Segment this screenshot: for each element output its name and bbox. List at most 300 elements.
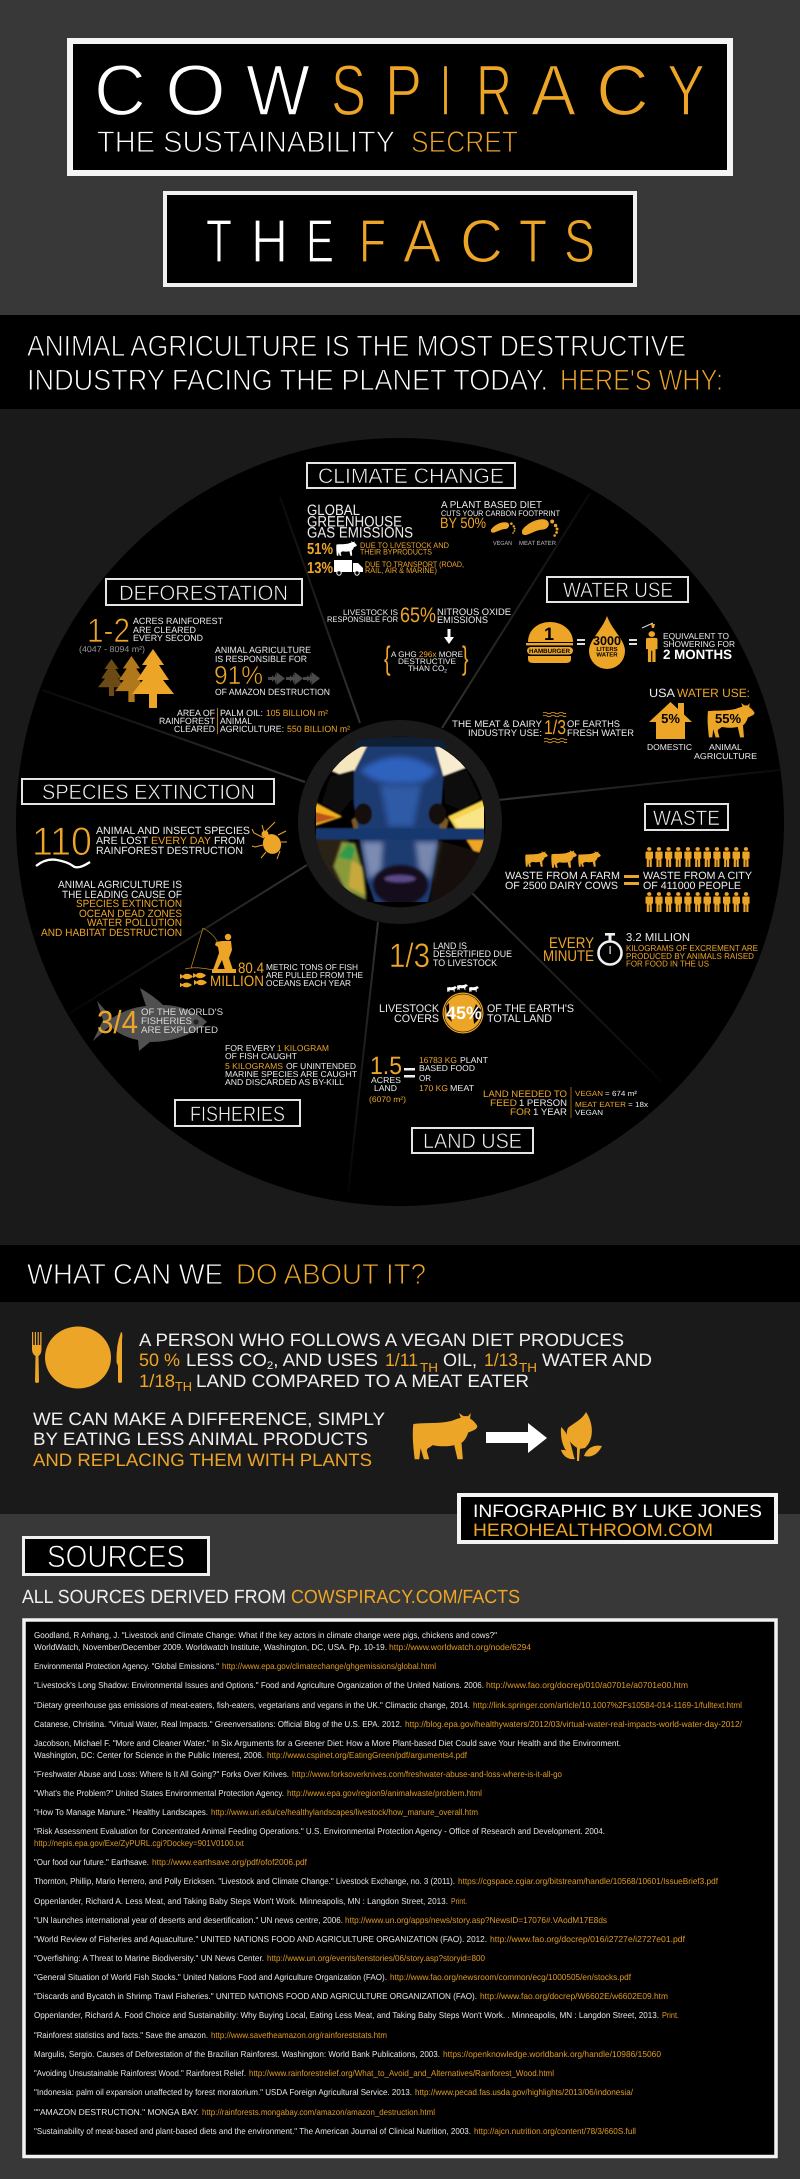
stat: 1-2 acres xyxy=(79,612,223,654)
panel: sources list: "Sustainability of meat-based and plant-based diets and the environment." The American Journal of Clinical Nutrition, 2003. xyxy=(34,2126,471,2136)
stat: three quarters fisheries: FISHERIES xyxy=(141,1016,192,1027)
text: vegan diet facts: , AND USES xyxy=(273,1350,378,1370)
intro band xyxy=(0,315,800,409)
panel: sources list: Environmental Protection Agency. "Global Emissions." xyxy=(34,1661,219,1671)
title: COW xyxy=(94,51,310,131)
panel: fisheries xyxy=(93,928,363,1126)
text: all sources derived: COWSPIRACY.COM/FACTS xyxy=(291,1587,520,1608)
stat: 1.5 acres xyxy=(369,1052,488,1104)
stat: land needed per person: FOR xyxy=(510,1107,531,1118)
text: waste from farm equals city xyxy=(505,870,752,892)
stat: 91 percent: IS RESPONSIBLE FOR xyxy=(215,654,307,664)
panel: sources list: Print. xyxy=(451,1896,467,1906)
stat: nitrous oxide: NITROUS OXIDE xyxy=(437,607,511,618)
icon: water drop 3000 litres: 3000 xyxy=(593,634,621,648)
panel: sources list: Goodland, R Anhang, J. "Livestock and Climate Change: What if the key actors in climate change were pigs, chickens and cows?" xyxy=(34,1630,497,1640)
stat: 13 percent transport: RAIL, AIR & MARINE) xyxy=(365,566,437,575)
equals xyxy=(629,639,637,645)
stat: 1.5 acres: LAND xyxy=(374,1083,397,1093)
stat: 80.4 million: OCEANS EACH YEAR xyxy=(266,978,351,988)
text: showering 2 months: SHOWERING FOR xyxy=(663,639,735,649)
stat: 3.2 million kilograms: KILOGRAMS OF EXCREMENT ARE xyxy=(626,943,758,953)
stat: one third fresh water: 1/3 xyxy=(544,717,566,739)
stat: 80.4 million: ARE PULLED FROM THE xyxy=(266,970,363,980)
title word: FACTS xyxy=(359,207,595,275)
callout: ghg 296x: 2 xyxy=(444,668,447,674)
panel: sources list: Jacobson, Michael F. "More and Cleaner Water." In Six Arguments for a Greener Diet: How a More Plant-based Diet Could save Your Health and the Environment. xyxy=(34,1738,621,1748)
heading: climate change: CLIMATE CHANGE xyxy=(318,465,504,488)
title: SPIRACY xyxy=(331,51,705,131)
text: all sources derived: ALL SOURCES DERIVED FROM xyxy=(22,1587,286,1608)
intro band: ANIMAL AGRICULTURE IS THE MOST DESTRUCTIVE xyxy=(27,330,686,363)
heading: deforestation: DEFORESTATION xyxy=(119,582,288,605)
panel: sources list: "What's the Problem?" United States Environmental Protection Agency. xyxy=(34,1788,284,1798)
icon: cow 55 percent xyxy=(708,703,755,737)
stat: area of rainforest cleared xyxy=(159,708,350,734)
icon: plant xyxy=(561,1412,602,1461)
text: global greenhouse gas emissions: GAS EMISSIONS xyxy=(307,524,413,542)
stat: 1.5 acres: OR xyxy=(419,1073,431,1083)
stat: 1-2 acres: EVERY SECOND xyxy=(133,633,203,643)
panel: deforestation xyxy=(79,579,350,734)
captions: domestic and animal agriculture: DOMESTIC xyxy=(647,742,692,752)
panel: sources list: http://www.epa.gov/region9/animalwaste/problem.html xyxy=(287,1788,482,1798)
stat: area of rainforest cleared: 550 BILLION m² xyxy=(287,724,350,734)
stat: 51 percent livestock: DUE TO LIVESTOCK AND xyxy=(360,541,449,550)
title word: THE: E xyxy=(306,207,334,275)
stat: 3.2 million kilograms xyxy=(626,932,758,968)
stat: nitrous oxide xyxy=(327,604,511,627)
icon: water drop 3000 litres: WATER xyxy=(596,652,618,658)
stat: 3.2 million kilograms: 3.2 MILLION xyxy=(626,932,690,944)
text: leading cause: SPECIES EXTINCTION xyxy=(76,898,182,910)
stat: one third fresh water xyxy=(452,712,634,743)
text: leading cause: THE LEADING CAUSE OF xyxy=(62,889,182,901)
stat: one third fresh water: INDUSTRY USE: xyxy=(468,728,542,739)
text: by-kill: 1 KILOGRAM xyxy=(277,1043,329,1053)
icon: plate, fork, knife xyxy=(32,1326,122,1388)
stat: one third desertified xyxy=(389,937,512,975)
stat: one third fresh water: OF EARTHS xyxy=(567,719,620,730)
callout: ghg 296x: { xyxy=(384,639,391,676)
stat: livestock covers 45 percent: 45% xyxy=(446,1003,482,1023)
stat: livestock covers 45 percent: LIVESTOCK xyxy=(379,1003,440,1015)
stat: nitrous oxide: 65% xyxy=(400,604,436,627)
icon: grey fish xyxy=(93,988,207,1051)
stat: 110 species xyxy=(32,820,250,864)
stat: 13 percent transport: 13% xyxy=(307,560,333,577)
title: COW: W xyxy=(246,51,310,131)
stat: one third fresh water: THE MEAT & DAIRY xyxy=(452,719,543,730)
squiggle underline xyxy=(36,860,90,867)
title word: FACTS: C xyxy=(460,207,503,275)
stat: livestock covers 45 percent: COVERS xyxy=(394,1013,439,1025)
stat: one third desertified: 1/3 xyxy=(389,937,430,975)
title: SPIRACY: R xyxy=(476,51,512,131)
callout: ghg 296x: A GHG 296x MORE xyxy=(391,650,463,659)
stat: 110 species: RAINFOREST DESTRUCTION xyxy=(96,845,243,857)
stat: livestock covers 45 percent: OF THE EARTH'S xyxy=(487,1003,574,1015)
callout: ghg 296x xyxy=(384,639,469,676)
stat: 110 species: FROM xyxy=(214,835,245,847)
panel: sources list: Oppenlander, Richard A. Less Meat, and Taking Baby Steps Won't Work. Minneapolis, MN : Langdon Street, 2013. xyxy=(34,1896,448,1906)
stat: 51 percent livestock xyxy=(307,541,449,558)
heading: water use: WATER USE xyxy=(563,579,673,602)
stat: 110 species: ANIMAL AND INSECT SPECIES xyxy=(96,825,250,837)
panel: sources list: "How To Manage Manure." Healthy Landscapes. xyxy=(34,1807,208,1817)
centre cow photo xyxy=(298,720,502,924)
title: SPIRACY: S xyxy=(331,51,366,131)
stat: 1.5 acres: 170 KG xyxy=(419,1083,448,1093)
intro band: INDUSTRY FACING THE PLANET TODAY. xyxy=(27,364,548,397)
panel: sources list: http://www.fao.org/docrep/016/i2727e/i2727e01.pdf xyxy=(490,1934,686,1944)
stat: nitrous oxide: EMISSIONS xyxy=(437,615,488,626)
band: what can we do: DO ABOUT IT? xyxy=(236,1259,426,1291)
panel: sources list: Print. xyxy=(662,2010,679,2020)
panel: sources list: https://cgspace.cgiar.org/bitstream/handle/10568/10601/IssueBrief3.pdf xyxy=(458,1876,719,1886)
panel: sources list: Thornton, Phillip, Mario Herrero, and Polly Ericksen. "Livestock and Climate Change." Livestock Exchange, no. 3 (2011). xyxy=(34,1876,455,1886)
panel: sources list: http://www.cspinet.org/EatingGreen/pdf/arguments4.pdf xyxy=(267,1750,468,1760)
stat: three quarters fisheries xyxy=(97,1004,223,1040)
stat: area of rainforest cleared: PALM OIL: xyxy=(220,708,263,718)
icon: three cows xyxy=(525,850,601,868)
credit box: HEROHEALTHROOM.COM xyxy=(473,1520,713,1540)
heading: species extinction: SPECIES EXTINCTION xyxy=(42,781,255,804)
panel: sources list: "Discards and Bycatch in Shrimp Trawl Fisheries." UNITED NATIONS FOOD AND AGRICULTURE ORGANIZATION (FAO). xyxy=(34,1991,477,2001)
stat: livestock covers 45 percent xyxy=(379,984,574,1034)
icon: house 5 percent xyxy=(649,702,692,739)
panel: sources list: "Our food our future." Earthsave. xyxy=(34,1857,149,1867)
text: vegan diet facts: TH xyxy=(519,1360,537,1375)
title word: FACTS: T xyxy=(519,207,547,275)
panel: sources list: http://www.pecad.fas.usda.gov/highlights/2013/06/indonesia/ xyxy=(415,2087,634,2097)
icon: water drop 3000 litres: LITERS xyxy=(596,646,618,653)
stat: land needed per person: = 674 m² xyxy=(605,1089,638,1098)
text: waste from farm equals city: OF 411000 PEOPLE xyxy=(643,880,741,892)
text: leading cause: WATER POLLUTION xyxy=(87,917,182,929)
title word: FACTS: F xyxy=(359,207,386,275)
panel: land use xyxy=(369,937,648,1153)
stat: 1.5 acres: 1.5 xyxy=(370,1052,402,1080)
text: global greenhouse gas emissions: GREENHOUSE xyxy=(307,514,402,530)
title box: The Facts xyxy=(165,193,635,285)
text: every minute xyxy=(543,935,594,965)
equals xyxy=(577,639,585,645)
heading: usa water use: WATER USE: xyxy=(677,686,750,700)
stat: three quarters fisheries: ARE EXPLOITED xyxy=(141,1025,218,1036)
footprint captions: MEAT EATER xyxy=(519,540,557,547)
stat: 80.4 million xyxy=(210,960,363,990)
icon: cow xyxy=(413,1413,477,1459)
text: vegan diet facts: LAND COMPARED TO A MEAT EATER xyxy=(196,1371,529,1391)
text: by-kill: MARINE SPECIES ARE CAUGHT xyxy=(225,1069,357,1079)
footprint captions xyxy=(493,540,557,547)
panel: sources list: http://link.springer.com/article/10.1007%2Fs10584-014-1169-1/fulltext.html xyxy=(473,1700,742,1710)
heading: fisheries: FISHERIES xyxy=(190,1103,285,1126)
panel: sources list xyxy=(24,1620,776,2156)
text: by-kill: AND DISCARDED AS BY-KILL xyxy=(225,1077,344,1087)
stat: one third desertified: LAND IS xyxy=(433,941,467,952)
panel: sources list: "Avoiding Unsustainable Rainforest Wood." Rainforest Relief. xyxy=(34,2068,246,2078)
panel: sources list: "Rainforest statistics and facts." Save the amazon. xyxy=(34,2030,208,2040)
main circle chart xyxy=(16,438,784,1206)
stat: 1.5 acres: MEAT xyxy=(450,1083,474,1093)
text: every minute: MINUTE xyxy=(543,948,594,965)
icon: house 5 percent: 5% xyxy=(661,711,680,726)
icon: hamburger xyxy=(526,622,573,663)
text: vegan diet facts: WATER AND xyxy=(542,1350,652,1370)
panel: sources list: http://www.rainforestrelief.org/What_to_Avoid_and_Alternatives/Rainforest_Wood.html xyxy=(249,2068,554,2078)
text: every minute: EVERY xyxy=(549,935,594,952)
panel: species extinction xyxy=(22,779,287,939)
panel: climate change xyxy=(307,463,560,676)
stat: land needed per person: = 18x xyxy=(628,1100,648,1109)
heading: sources: SOURCES xyxy=(47,1539,185,1574)
title: SPIRACY: P xyxy=(385,51,422,131)
callout: ghg 296x: DESTRUCTIVE xyxy=(398,657,456,666)
title word: FACTS: S xyxy=(564,207,595,275)
panel: sources list: http://rainforests.mongabay.com/amazon/amazon_destruction.html xyxy=(202,2107,435,2117)
panel: sources list: http://www.savetheamazon.org/rainforeststats.htm xyxy=(211,2030,387,2040)
panel: sources list: http://www.uri.edu/ce/healthylandscapes/livestock/how_manure_overall.htm xyxy=(211,1807,478,1817)
title word: FACTS: A xyxy=(403,207,441,275)
callout: ghg 296x: THAN CO xyxy=(408,664,444,673)
stat: 51 percent livestock: THEIR BYPRODUCTS xyxy=(360,548,432,556)
stat: area of rainforest cleared: AGRICULTURE: xyxy=(220,724,284,734)
stat: area of rainforest cleared: AREA OF xyxy=(177,708,215,718)
stat: three quarters fisheries: OF THE WORLD'S xyxy=(141,1007,223,1018)
credit box xyxy=(459,1495,776,1542)
panel: sources list: ""AMAZON DESTRUCTION." MONGA BAY. xyxy=(34,2107,199,2117)
text: vegan diet facts: 50 % xyxy=(139,1350,180,1370)
stat: 110 species: 110 xyxy=(32,820,92,864)
title word: THE: T xyxy=(206,207,232,275)
stat: area of rainforest cleared: 105 BILLION m² xyxy=(266,708,328,718)
band: what can we do: WHAT CAN WE xyxy=(27,1259,223,1291)
stat: 1.5 acres: (6070 m²) xyxy=(369,1095,406,1104)
stat: 1-2 acres: (4047 - 8094 m²) xyxy=(79,644,145,654)
stat: 13 percent transport: DUE TO TRANSPORT (ROAD, xyxy=(365,560,464,569)
panel: sources list: "Overfishing: A Threat to Marine Biodiversity." UN News Center. xyxy=(34,1953,264,1963)
title: SPIRACY: C xyxy=(596,51,649,131)
panel: sources list: http://www.un.org/events/tenstories/06/story.asp?storyid=800 xyxy=(267,1953,485,1963)
arrow: down xyxy=(444,629,454,644)
stat: land needed per person: MEAT EATER xyxy=(575,1100,627,1109)
text: global greenhouse gas emissions xyxy=(307,502,413,542)
stat: one third fresh water: FRESH WATER xyxy=(567,728,634,739)
stat: 51 percent livestock: 51% xyxy=(307,541,333,558)
text: showering 2 months xyxy=(663,631,735,662)
panel: sources list: WorldWatch, November/December 2009. Worldwatch Institute, Washington, DC, USA. Pp. 10-19. xyxy=(34,1642,387,1652)
heading: usa water use: USA xyxy=(649,686,675,700)
panel: sources list: http://www.earthsave.org/pdf/ofof2006.pdf xyxy=(152,1857,308,1867)
text: waste from farm equals city: WASTE FROM A CITY xyxy=(643,870,752,882)
text: plant based diet: BY 50% xyxy=(440,515,486,532)
stat: land needed per person: VEGAN xyxy=(575,1108,603,1117)
icon: water drop 3000 litres xyxy=(589,616,625,669)
panel: sources list: "Dietary greenhouse gas emissions of meat-eaters, fish-eaters, vegetarians and vegans in the UK." Climactic change, 2014. xyxy=(34,1700,470,1710)
text: vegan diet facts: TH xyxy=(175,1379,192,1394)
icon: footprints xyxy=(491,519,559,537)
stat: nitrous oxide: LIVESTOCK IS xyxy=(343,608,398,617)
text: by-kill: FOR EVERY xyxy=(225,1043,275,1053)
stat: 1.5 acres: ACRES xyxy=(371,1075,401,1085)
stat: 3.2 million kilograms: PRODUCED BY ANIMALS RAISED xyxy=(626,951,754,961)
panel: sources list: Margulis, Sergio. Causes of Deforestation of the Brazilian Rainforest. Washington: World Bank Publications, 2003. xyxy=(34,2049,440,2059)
text: vegan diet facts: LESS CO xyxy=(186,1350,264,1370)
text: make a difference: WE CAN MAKE A DIFFERENCE, SIMPLY xyxy=(33,1409,385,1429)
panel: sources list: "World Review of Fisheries and Aquaculture." UNITED NATIONS FOOD AND AGRICULTURE ORGANIZATION (FAO). 2012. xyxy=(34,1934,487,1944)
background: dark grey header xyxy=(0,0,800,315)
title: COW: O xyxy=(165,51,226,131)
text: global greenhouse gas emissions: GLOBAL xyxy=(307,502,360,519)
panel: sources list: "Livestock's Long Shadow: Environmental Issues and Options." Food and Agriculture Organization of the United Nations. 2006. xyxy=(34,1680,484,1690)
text: plant based diet xyxy=(440,500,560,532)
stat: area of rainforest cleared: ANIMAL xyxy=(220,716,252,726)
captions: domestic and animal agriculture: ANIMAL xyxy=(709,742,742,752)
text: leading cause: AND HABITAT DESTRUCTION xyxy=(41,927,182,939)
background: grey sources area xyxy=(0,1514,800,2179)
stat: 13 percent transport xyxy=(307,560,464,577)
panel: sources list: http://www.worldwatch.org/node/6294 xyxy=(389,1642,531,1652)
text: leading cause xyxy=(41,879,182,939)
panel: sources list: http://www.forksoverknives.com/freshwater-abuse-and-loss-where-is-it-all-go xyxy=(292,1769,562,1779)
panel: sources list: "Risk Assessment Evaluation for Concentrated Animal Feeding Operations." U.S. Environmental Protection Agency - Office of Research and Development. 2004. xyxy=(34,1826,605,1836)
text: vegan diet facts: 1/11 xyxy=(385,1350,418,1370)
stat: land needed per person: 1 PERSON xyxy=(519,1098,567,1109)
icon: insect xyxy=(252,822,287,859)
panel: waste xyxy=(505,804,758,968)
panel: sources list: http://www.fao.org/docrep/W6602E/w6602E09.htm xyxy=(480,1991,668,2001)
text: vegan diet facts xyxy=(139,1330,652,1394)
stat: land needed per person: LAND NEEDED TO xyxy=(483,1089,567,1100)
title word: THE xyxy=(206,207,334,275)
stat: three quarters fisheries: 3/4 xyxy=(97,1004,138,1040)
panel: sources list: http://www.fao.org/newsroom/common/ecg/1000505/en/stocks.pdf xyxy=(390,1972,632,1982)
panel: sources list: Oppenlander, Richard A. Food Choice and Sustainability: Why Buying Local, Eating Less Meat, and Taking Baby Steps Won't Work. . Minneapolis, MN : Langdon Street, 2013. xyxy=(34,2010,659,2020)
stat: 1.5 acres: BASED FOOD xyxy=(419,1063,475,1073)
stat: land needed per person xyxy=(483,1087,648,1118)
panel: sources list: http://www.epa.gov/climatechange/ghgemissions/global.html xyxy=(222,1661,436,1671)
stat: 1-2 acres: ACRES RAINFOREST xyxy=(133,616,223,626)
panel: sources list: https://openknowledge.worldbank.org/handle/10986/15060 xyxy=(443,2049,661,2059)
footprint captions: VEGAN xyxy=(493,540,512,547)
heading: waste: WASTE xyxy=(653,807,720,830)
text: by-kill: 5 KILOGRAMS xyxy=(225,1061,283,1071)
text: vegan diet facts: TH xyxy=(420,1360,438,1375)
panel: sources list: "UN launches international year of deserts and desertification." UN news centre, 2006. xyxy=(34,1915,343,1925)
stat: 80.4 million: METRIC TONS OF FISH xyxy=(266,962,358,972)
stat: 91 percent: ANIMAL AGRICULTURE xyxy=(215,645,311,655)
text: make a difference: BY EATING LESS ANIMAL PRODUCTS xyxy=(33,1429,368,1449)
band: what can we do xyxy=(0,1245,800,1302)
icon: fisherman xyxy=(180,928,236,987)
stat: 1.5 acres: PLANT xyxy=(460,1055,488,1065)
icon: three trees xyxy=(98,649,174,708)
panel: sources list: "General Situation of World Fish Stocks." United Nations Food and Agriculture Organization (FAO). xyxy=(34,1972,387,1982)
panel: sources list: Washington, DC: Center for Science in the Public Interest, 2006. xyxy=(34,1750,264,1760)
panel: sources list: "Freshwater Abuse and Loss: Where Is It All Going?" Forks Over Knives. xyxy=(34,1769,289,1779)
panel: sources list: Catanese, Christina. "Virtual Water, Real Impacts." Greenversations: Official Blog of the U.S. EPA. 2012. xyxy=(34,1719,402,1729)
stat: 91 percent: 91% xyxy=(214,660,263,690)
text: vegan diet facts: A PERSON WHO FOLLOWS A VEGAN DIET PRODUCES xyxy=(139,1330,624,1350)
text: showering 2 months: EQUIVALENT TO xyxy=(663,631,729,641)
credit box: INFOGRAPHIC BY LUKE JONES xyxy=(473,1501,762,1521)
title word: THE: H xyxy=(251,207,288,275)
heading: land use: LAND USE xyxy=(423,1130,522,1153)
text: by-kill: OF UNINTENDED xyxy=(286,1061,356,1071)
stat: area of rainforest cleared: CLEARED xyxy=(174,724,215,734)
stat: 3.2 million kilograms: FOR FOOD IN THE US xyxy=(626,958,709,968)
stat: 80.4 million: MILLION xyxy=(210,973,264,990)
icon: hamburger: 1 xyxy=(544,624,554,644)
stat: one third desertified: TO LIVESTOCK xyxy=(433,958,498,969)
panel: sources list: "Indonesia: palm oil expansion unaffected by forest moratorium." USDA Foreign Agricultural Service. 2013. xyxy=(34,2087,412,2097)
stat: 91 percent: OF AMAZON DESTRUCTION xyxy=(215,687,330,697)
panel: water use xyxy=(452,577,757,761)
stat: 80.4 million: 80.4 xyxy=(238,960,264,977)
stat: livestock covers 45 percent: TOTAL LAND xyxy=(487,1013,552,1025)
text: by-kill: OF FISH CAUGHT xyxy=(225,1051,297,1061)
stat: land needed per person: 1 YEAR xyxy=(533,1107,567,1118)
icon: stopwatch xyxy=(598,933,622,964)
stat: land needed per person: FEED xyxy=(490,1098,517,1109)
intro band: HERE'S WHY: xyxy=(560,364,723,397)
text: waste from farm equals city: OF 2500 DAIRY COWS xyxy=(505,880,618,892)
stat: area of rainforest cleared: RAINFOREST xyxy=(159,716,215,726)
panel: sources list: http://nepis.epa.gov/Exe/ZyPURL.cgi?Dockey=901V0100.txt xyxy=(34,1838,245,1848)
panel: sources list: http://www.un.org/apps/news/story.asp?NewsID=17076#.VAodM17E8ds xyxy=(345,1915,607,1925)
text: waste from farm equals city: WASTE FROM A FARM xyxy=(505,870,620,882)
icon: hamburger: HAMBURGER xyxy=(529,648,571,655)
icon: person showering xyxy=(642,623,658,662)
icon: cow 55 percent: 55% xyxy=(715,711,741,726)
text: vegan diet facts: 1/13 xyxy=(484,1350,518,1370)
text: by-kill xyxy=(225,1043,357,1087)
callout: ghg 296x: } xyxy=(462,639,469,676)
stat: 110 species: EVERY DAY xyxy=(151,835,211,847)
stat: 1.5 acres: 16783 KG xyxy=(419,1055,457,1065)
panel: sources list: http://blog.epa.gov/healthywaters/2012/03/virtual-water-real-impacts-world-water-day-2012/ xyxy=(405,1719,743,1729)
stat: one third desertified: DESERTIFIED DUE xyxy=(433,949,512,960)
title: COW: C xyxy=(94,51,146,131)
title box: Cowspiracy xyxy=(70,41,730,173)
text: vegan diet facts: 1/18 xyxy=(139,1371,175,1391)
text: vegan diet facts: OIL, xyxy=(443,1350,477,1370)
stat: 1-2 acres: 1-2 xyxy=(87,612,130,650)
text: all sources derived xyxy=(22,1587,520,1608)
stat: 1-2 acres: ARE CLEARED xyxy=(133,625,196,635)
text: showering 2 months: 2 MONTHS xyxy=(663,647,732,662)
text: leading cause: OCEAN DEAD ZONES xyxy=(79,908,182,920)
title: SPIRACY: A xyxy=(531,51,576,131)
text: make a difference: AND REPLACING THEM WITH PLANTS xyxy=(33,1450,372,1470)
title: SPIRACY: I xyxy=(440,51,451,131)
subtitle: THE SUSTAINABILITY xyxy=(97,126,395,159)
panel: sources list: http://ajcn.nutrition.org/content/78/3/660S.full xyxy=(474,2126,636,2136)
text: make a difference xyxy=(33,1409,385,1470)
subtitle: SECRET xyxy=(411,126,518,159)
text: plant based diet: A PLANT BASED DIET xyxy=(441,500,542,511)
text: vegan diet facts: 2 xyxy=(267,1360,273,1372)
stat: nitrous oxide: RESPONSIBLE FOR xyxy=(327,615,398,624)
text: leading cause: ANIMAL AGRICULTURE IS xyxy=(58,879,182,891)
stat: 110 species: ARE LOST xyxy=(96,835,149,847)
title: SPIRACY: Y xyxy=(667,51,705,131)
icon: people rows xyxy=(646,847,750,912)
text: plant based diet: CUTS YOUR CARBON FOOTPRINT xyxy=(441,509,560,518)
stat: 91 percent xyxy=(214,645,330,697)
